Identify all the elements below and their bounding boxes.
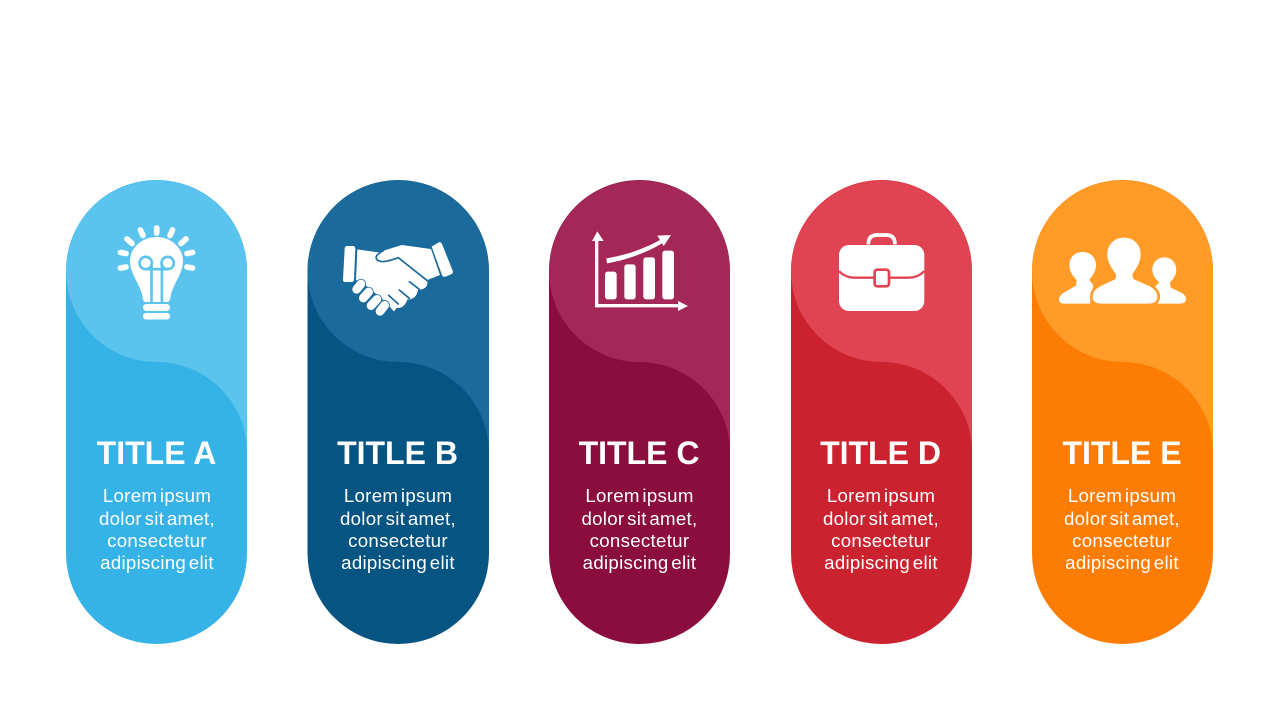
text block: Title A body: dolor sit amet, [99,508,215,529]
icon: handshake [343,242,453,311]
panel: Title B [308,180,489,644]
heading: Title E: TITLE E [1062,435,1182,471]
text block: Title D body: dolor sit amet, [823,508,939,529]
text block: Title A body: adipiscing elit [100,552,214,573]
text block: Title D body: consectetur [831,530,931,551]
icon: light bulb [120,228,192,320]
text block: Title C body: consectetur [590,530,689,551]
text block: Title D body: adipiscing elit [824,552,938,573]
text block: Title D body: Lorem ipsum [827,485,935,506]
heading: Title A: TITLE A [97,435,216,471]
text block: Title A body: consectetur [107,530,207,551]
text block: Title B body: consectetur [348,530,448,551]
heading: Title C: TITLE C [579,435,699,471]
panel: Title C [549,180,730,644]
icon: briefcase [839,235,924,311]
panel: Title E [1032,180,1213,644]
panel: Title D [791,180,972,644]
text block: Title C body: dolor sit amet, [581,508,698,529]
heading: Title B: TITLE B [337,435,458,471]
text block: Title B body: adipiscing elit [341,552,455,573]
panel: Title A [66,180,247,644]
text block: Title E body: Lorem ipsum [1068,485,1176,506]
text block: Title E body: adipiscing elit [1065,552,1179,573]
icon: group of people [1059,238,1186,304]
text block: Title A body: Lorem ipsum [103,485,211,506]
text block: Title B body: Lorem ipsum [344,485,452,506]
text block: Title B body: dolor sit amet, [340,508,456,529]
text block: Title E body: consectetur [1072,530,1172,551]
heading: Title D: TITLE D [820,435,941,471]
text block: Title E body: dolor sit amet, [1064,508,1180,529]
icon: growth chart [592,231,688,311]
text block: Title C body: adipiscing elit [583,552,697,573]
text block: Title C body: Lorem ipsum [585,485,694,506]
